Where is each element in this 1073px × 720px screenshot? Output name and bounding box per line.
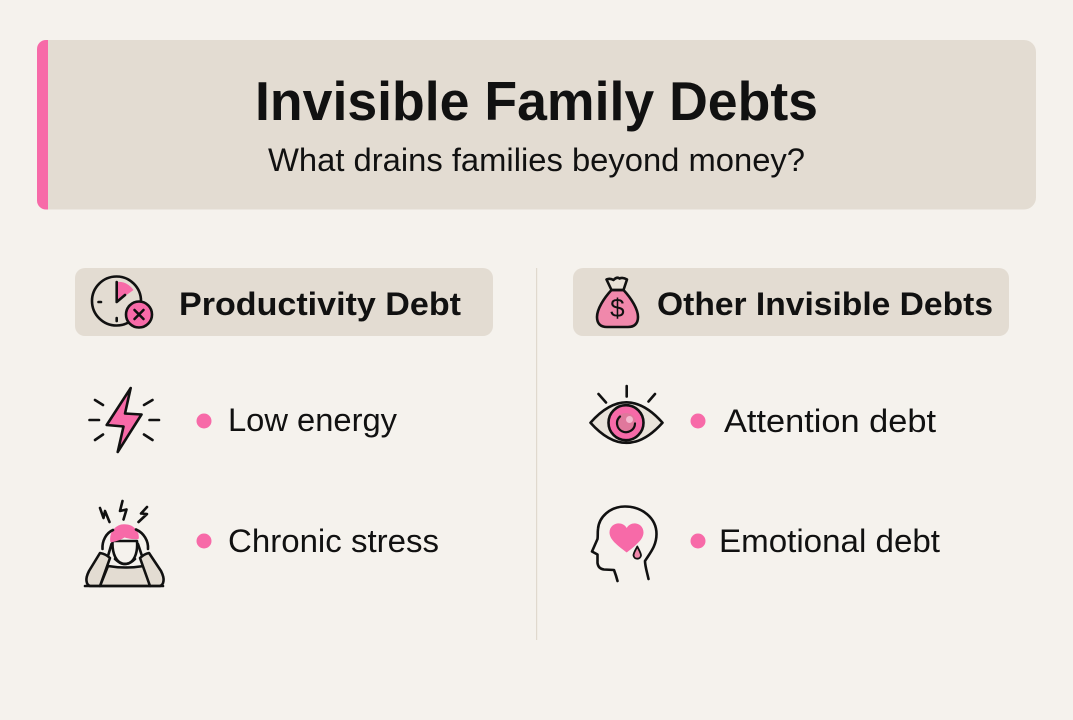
heading text: productivity debt: Productivity Debt	[179, 286, 461, 322]
icon: clock with x badge	[92, 276, 152, 328]
label: emotional debt: Emotional debt	[719, 523, 940, 559]
label: chronic stress: Chronic stress	[228, 523, 439, 559]
icon: stressed person	[85, 501, 164, 586]
heading text: other invisible debts: Other Invisible Debts	[657, 286, 993, 322]
panel: other invisible debts heading	[573, 268, 1009, 336]
bullet: emotional debt	[690, 534, 706, 548]
panel: productivity debt heading	[75, 268, 493, 336]
icon: money bag	[597, 278, 638, 327]
title: Invisible Family Debts	[255, 70, 818, 132]
divider	[536, 268, 537, 640]
dollar sign: $	[610, 293, 625, 323]
panel: header banner	[37, 40, 1036, 210]
icon: head with heart	[592, 506, 656, 581]
bullet: low energy	[196, 414, 212, 428]
icon: lightning bolt	[90, 388, 159, 452]
label: attention debt: Attention debt	[724, 403, 936, 439]
bullet: chronic stress	[196, 534, 212, 548]
icon: eye	[590, 386, 662, 443]
bullet: attention debt	[690, 414, 706, 428]
label: low energy: Low energy	[228, 402, 397, 438]
subtitle: What drains families beyond money?	[268, 142, 805, 178]
